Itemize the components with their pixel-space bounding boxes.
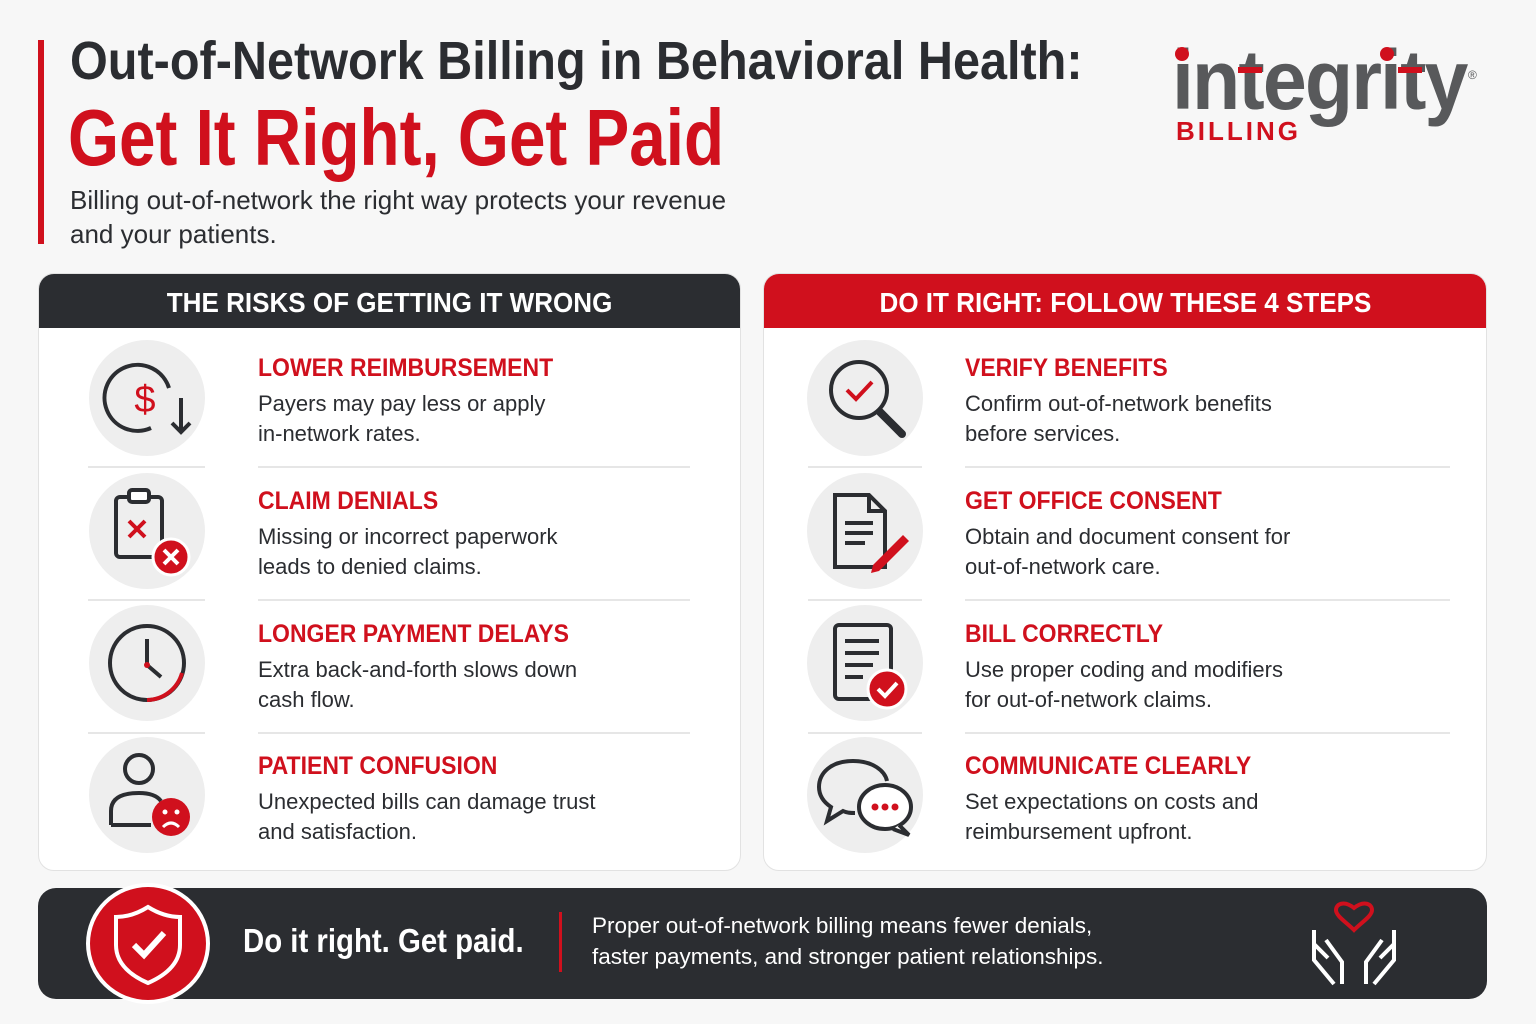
title: Out-of-Network Billing in Behavioral Health: [70, 31, 1083, 91]
logo: integrity [1172, 33, 1467, 127]
footer text: faster payments, and stronger patient relationships. [592, 944, 1104, 969]
heading: risks [39, 274, 740, 328]
item: lower reimbursement: in-network rates. [258, 421, 421, 446]
icon: clock [89, 605, 205, 721]
icon: clipboard x [89, 473, 205, 589]
panel: steps [763, 273, 1487, 871]
item: patient confusion: Unexpected bills can damage trust [258, 789, 596, 814]
icon: magnifier check [807, 340, 923, 456]
subtitle: Billing out-of-network the right way protects your revenue [70, 185, 726, 215]
icon: shield [86, 883, 210, 1004]
item: payment delays: Extra back-and-forth slows down [258, 657, 577, 682]
accent bar [38, 40, 44, 244]
heading: risks: THE RISKS OF GETTING IT WRONG [167, 287, 612, 318]
item: communicate clearly: Set expectations on costs and [965, 789, 1259, 814]
item: verify benefits: Confirm out-of-network benefits [965, 391, 1272, 416]
item: patient confusion [258, 752, 596, 844]
item: claim denials: leads to denied claims. [258, 554, 482, 579]
item: verify benefits: VERIFY BENEFITS [965, 354, 1168, 382]
footer headline: Do it right. Get paid. [243, 922, 524, 959]
item: patient confusion: PATIENT CONFUSION [258, 752, 497, 780]
icon: dollar down: $ [134, 379, 156, 421]
icon: dollar down [89, 340, 205, 456]
item: payment delays [258, 620, 577, 712]
item: bill correctly: Use proper coding and modifiers [965, 657, 1283, 682]
item: office consent [965, 487, 1290, 579]
item: claim denials: CLAIM DENIALS [258, 487, 438, 515]
item: office consent: Obtain and document consent for [965, 524, 1290, 549]
logo: ® [1468, 68, 1477, 82]
icon: document pen [807, 473, 923, 589]
title: Get It Right, Get Paid [68, 93, 724, 182]
icon: chat bubbles [807, 737, 923, 853]
panel: risks [38, 273, 741, 871]
icon: sad patient [89, 737, 205, 853]
item: lower reimbursement: LOWER REIMBURSEMENT [258, 354, 553, 382]
footer banner [38, 888, 1487, 999]
item: lower reimbursement: Payers may pay less or apply [258, 391, 545, 416]
item: bill correctly: BILL CORRECTLY [965, 620, 1163, 648]
footer text: Proper out-of-network billing means fewer denials, [592, 913, 1092, 938]
title [68, 31, 1083, 182]
icon: hands heart [1312, 902, 1396, 986]
subtitle [70, 185, 726, 249]
item: office consent: out-of-network care. [965, 554, 1161, 579]
icon: document check [807, 605, 923, 721]
subtitle: and your patients. [70, 219, 277, 249]
item: patient confusion: and satisfaction. [258, 819, 417, 844]
item: claim denials: Missing or incorrect paperwork [258, 524, 558, 549]
heading: steps: DO IT RIGHT: FOLLOW THESE 4 STEPS [879, 287, 1371, 318]
dividers left [88, 466, 205, 468]
item: verify benefits [965, 354, 1272, 446]
item: communicate clearly: COMMUNICATE CLEARLY [965, 752, 1251, 780]
item: payment delays: cash flow. [258, 687, 355, 712]
item: communicate clearly: reimbursement upfront. [965, 819, 1192, 844]
item: office consent: GET OFFICE CONSENT [965, 487, 1222, 515]
logo: BILLING [1176, 116, 1301, 146]
item: bill correctly [965, 620, 1283, 712]
item: verify benefits: before services. [965, 421, 1120, 446]
item: lower reimbursement [258, 354, 553, 446]
heading: steps [764, 274, 1486, 328]
item: payment delays: LONGER PAYMENT DELAYS [258, 620, 569, 648]
item: claim denials [258, 487, 558, 579]
item: bill correctly: for out-of-network claims. [965, 687, 1212, 712]
footer text [592, 913, 1104, 969]
item: communicate clearly [965, 752, 1259, 844]
